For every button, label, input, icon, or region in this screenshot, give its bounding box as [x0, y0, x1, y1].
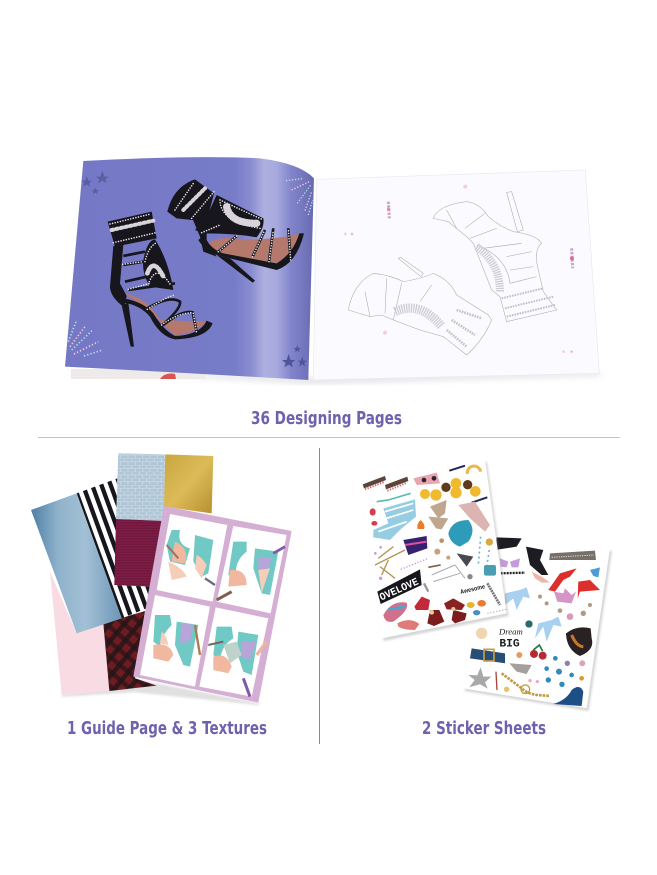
lilac earrings — [500, 558, 520, 567]
heading: 36 Designing Pages: 36 Designing Pages — [251, 408, 402, 429]
guide page — [133, 506, 292, 703]
bow stickers dark — [495, 537, 548, 575]
sticker sheet 2 — [463, 536, 610, 708]
left shoe — [108, 212, 213, 347]
texture sheet: burgundy — [114, 519, 164, 587]
roses — [476, 628, 487, 639]
silver chain — [432, 565, 465, 582]
sticker sheet 1 shadow — [360, 462, 509, 641]
sticker sheet 1 — [358, 459, 507, 638]
small charms — [434, 549, 440, 555]
stars bottom right — [282, 345, 307, 367]
text: OVELOVE: OVELOVE — [378, 577, 421, 604]
text sticker: You are Awesome: Awesome — [460, 583, 486, 596]
crown — [554, 588, 576, 603]
beads — [538, 595, 592, 620]
red bow — [548, 568, 600, 598]
line-art shoe lower left — [348, 257, 492, 355]
cherries — [530, 650, 538, 658]
belt — [470, 648, 505, 663]
butterfly — [590, 567, 600, 577]
guide panel 1 — [157, 514, 227, 602]
braided band — [487, 583, 500, 605]
rainbow — [467, 466, 481, 474]
shell — [448, 520, 472, 547]
wave — [553, 687, 583, 706]
blue ribbons — [505, 587, 530, 610]
line-art shoe upper right — [433, 192, 557, 322]
lips — [370, 508, 376, 516]
hearts — [467, 600, 486, 615]
texture sheet: stripes — [77, 478, 150, 618]
glitter pile — [509, 663, 532, 674]
guide panel 3 — [140, 595, 210, 687]
book shadow — [66, 370, 600, 384]
guide panel 2 — [217, 526, 287, 613]
sticker sheet 2 shadow — [465, 539, 612, 711]
dotted rays top right — [286, 179, 313, 215]
chains — [375, 547, 405, 578]
right shoe — [167, 179, 304, 283]
heading: 2 Sticker Sheets: 2 Sticker Sheets — [422, 718, 546, 739]
texture sheet: denim — [31, 493, 122, 633]
stars top left — [81, 171, 109, 194]
strip of page underneath — [71, 369, 205, 379]
rainbow arrow — [377, 493, 411, 502]
love sticker — [377, 569, 422, 604]
panel: guide page and textures — [31, 453, 292, 705]
guide panel 4 — [199, 607, 268, 697]
vertical divider — [319, 448, 320, 744]
floral bunch — [458, 502, 490, 532]
sheets shadow — [62, 679, 260, 705]
scrunchie — [566, 627, 592, 656]
blue dashes — [478, 537, 489, 567]
fuzzy pom-poms — [383, 602, 407, 622]
comb stickers — [363, 476, 386, 488]
red velvet bows — [414, 597, 430, 610]
small gem ornaments — [344, 185, 574, 353]
text sticker: BIG: BIG — [499, 639, 520, 651]
panel: open colouring book — [65, 157, 600, 384]
right page: line-art shoes — [313, 170, 599, 380]
wings — [373, 499, 416, 540]
texture sheet: croc — [116, 453, 165, 521]
text sticker: Dream Big: Dream — [498, 626, 523, 636]
gems — [544, 656, 585, 687]
fire — [417, 520, 425, 529]
horizontal divider — [38, 437, 620, 438]
yellow flowers — [420, 478, 481, 501]
texture sheet: gold — [164, 454, 213, 513]
star — [468, 667, 491, 689]
panel: sticker sheets — [358, 459, 612, 711]
left page: illustrated shoes on purple — [65, 157, 314, 380]
flowers pink — [413, 473, 440, 485]
cats — [430, 500, 447, 518]
pink bow small — [532, 572, 550, 583]
gold chain — [502, 673, 550, 696]
dotted rays bottom left — [68, 320, 103, 356]
text sticker — [403, 536, 427, 555]
texture sheet: plaid — [103, 611, 157, 691]
texture sheet: pink — [50, 572, 109, 695]
heading: 1 Guide Page and 3 Textures: 1 Guide Page & 3 Textures — [67, 718, 267, 739]
